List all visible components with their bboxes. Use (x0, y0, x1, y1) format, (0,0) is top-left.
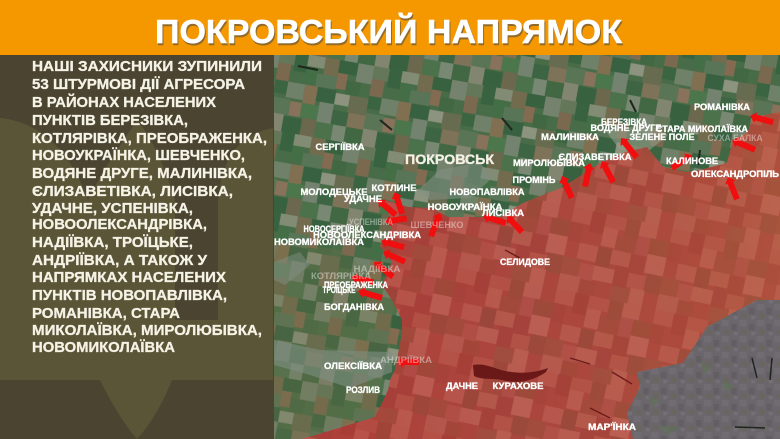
arrow: Andriivka (397, 356, 419, 368)
text block: summary of repelled assaults: МИКОЛАЇВКА, МИРОЛЮБІВКА, (32, 322, 262, 339)
label: Uspenivka: УСПЕНІВКА (349, 217, 393, 227)
label: Oleksiivka: ОЛЕКСІЇВКА (324, 361, 383, 371)
text block: summary of repelled assaults: НАШІ ЗАХИСНИКИ ЗУПИНИЛИ (32, 59, 262, 75)
label: Zelene Pole: ЗЕЛЕНЕ ПОЛЕ (630, 132, 694, 142)
label: Dachne: ДАЧНЕ (446, 381, 478, 391)
label: Bohdanivka: БОГДАНІВКА (324, 302, 384, 312)
label: Kalynove: КАЛИНОВЕ (666, 156, 718, 166)
label: Sukha Balka: СУХА БАЛКА (708, 133, 763, 143)
arrow: Kotlyarivka (350, 272, 375, 288)
arrow: Shevchenko (426, 211, 445, 238)
label: Malynivka: МАЛИНІВКА (541, 132, 600, 142)
label: Kurakhove: КУРАХОВЕ (492, 381, 544, 391)
label: Myroliubivka: МИРОЛЮБІВКА (513, 158, 586, 168)
map: satellite terrain (274, 55, 780, 439)
label: Novopavlivka: НОВОПАВЛІВКА (450, 187, 525, 197)
text block: summary of repelled assaults: НОВООЛЕКСАНДРІВКА, (32, 217, 207, 233)
arrow: Sukha Balka (730, 135, 757, 155)
map: Kurakhove reservoir (473, 365, 548, 382)
label: Selydove: СЕЛИДОВЕ (500, 257, 550, 267)
label: Lysivka: ЛИСІВКА (482, 208, 525, 218)
text block: summary of repelled assaults: 53 ШТУРМОВІ ДІЇ АГРЕСОРА (32, 76, 246, 93)
map: city of Kurakhove and Marinka, grey urban area (627, 300, 780, 439)
map: occupied territory overlay (302, 112, 780, 439)
label: Marinka: МАР'ЇНКА (588, 422, 637, 432)
text block: summary of repelled assaults: ВОДЯНЕ ДРУГЕ, МАЛИНІВКА, (32, 166, 252, 182)
arrow: Promin (557, 174, 577, 200)
arrows: red attack directions (350, 111, 775, 368)
label: Kotlyarivka: КОТЛЯРІВКА (311, 271, 372, 281)
label: Troitske: ТРОЇЦЬКЕ (322, 285, 356, 295)
text block: summary of repelled assaults: РОМАНІВКА, СТАРА (32, 306, 181, 322)
text block: summary of repelled assaults: НОВОУКРАЇНКА, ШЕВЧЕНКО, (32, 147, 245, 164)
arrow: Kotlyne (390, 190, 407, 216)
label: Oleksandropil: ОЛЕКСАНДРОПІЛЬ (691, 169, 780, 179)
arrow: Udachne (374, 196, 399, 219)
text block: summary of repelled assaults: НОВОМИКОЛАЇВКА (32, 339, 176, 356)
label: Nadiivka: НАДІЇВКА (354, 264, 401, 274)
title: ПОКРОВСЬКИЙ НАПРЯМОК (155, 12, 623, 50)
label: Berezivka: БЕРЕЗІВКА (601, 117, 647, 127)
arrow: Kalynove (669, 150, 695, 173)
label: Pokrovsk city: ПОКРОВСЬК (405, 151, 494, 167)
text block: summary of repelled assaults: АНДРІЇВКА, А ТАКОЖ У (32, 252, 208, 269)
arrow: Troitske (356, 286, 384, 303)
text block: summary of repelled assaults: ПУНКТІВ БЕРЕЗІВКА, (32, 113, 188, 129)
text block: summary of repelled assaults: ПУНКТІВ НОВОПАВЛІВКА, (32, 288, 227, 304)
label: Yelyzavetivka: ЄЛИЗАВЕТІВКА (558, 152, 632, 162)
label: Udachne: УДАЧНЕ (344, 194, 382, 204)
map labels: settlements (274, 102, 780, 432)
label: Novoukrainka: НОВОУКРАЇНКА (428, 202, 503, 212)
text block: summary of repelled assaults: НАПРЯМКАХ НАСЕЛЕНИХ (32, 270, 226, 286)
label: Novooleksandrivka: НОВООЛЕКСАНДРІВКА (313, 230, 422, 240)
text block: summary of repelled assaults: НАДІЇВКА, ТРОЇЦЬКЕ, (32, 234, 193, 251)
label: Molodetske: МОЛОДЕЦЬКЕ (300, 187, 368, 197)
arrow: Yelyzavetivka (597, 158, 618, 185)
arrow: Novomykolaivka (381, 247, 407, 267)
arrow: Lysivka (503, 212, 526, 236)
text block: summary of repelled assaults: В РАЙОНАХ НАСЕЛЕНИХ (32, 93, 216, 111)
label: Novomykolaivka: НОВОМИКОЛАЇВКА (274, 237, 365, 247)
label: Serhiivka: СЕРГІЇВКА (316, 142, 365, 152)
map labels: occupied settlements, faded (311, 133, 763, 365)
arrow: Myroliubivka (580, 162, 595, 188)
arrow: Oleksandropil (723, 175, 742, 201)
text block: summary of repelled assaults: УДАЧНЕ, УСПЕНІВКА, (32, 201, 193, 217)
arrow: Uspenivka (384, 213, 408, 227)
text block: summary of repelled assaults: ЄЛИЗАВЕТІВКА, ЛИСІВКА, (32, 184, 233, 200)
label: Kotlyne: КОТЛИНЕ (372, 183, 416, 193)
arrow: Nadiivka (371, 258, 396, 281)
label: Romanivka: РОМАНІВКА (694, 102, 751, 112)
text block: summary of repelled assaults: КОТЛЯРІВКА, ПРЕОБРАЖЕНКА, (32, 131, 267, 147)
label: Andriivka: АНДРІЇВКА (380, 355, 433, 365)
label: Stara Mykolaivka: СТАРА МИКОЛАЇВКА (656, 124, 748, 134)
label: Vodiane Druhe: ВОДЯНЕ ДРУГЕ (590, 123, 662, 133)
header bar (0, 0, 780, 55)
arrow: Novooleksandrivka (380, 236, 406, 253)
label: Novoserhiivka: НОВОСЕРГІЇВКА (304, 224, 365, 234)
text block: summary of repelled assaults (32, 59, 267, 356)
label: Preobrazhenka: ПРЕОБРАЖЕНКА (324, 280, 388, 290)
label: Shevchenko: ШЕВЧЕНКО (410, 220, 464, 230)
arrow: Novoukrainka (481, 211, 508, 228)
panel: left text background (0, 55, 274, 439)
label: Promin: ПРОМІНЬ (512, 175, 556, 185)
arrow: Vodiane Druhe (617, 135, 641, 161)
label: Rozliv: РОЗЛИВ (346, 385, 380, 395)
arrow: Romanivka (749, 111, 775, 128)
